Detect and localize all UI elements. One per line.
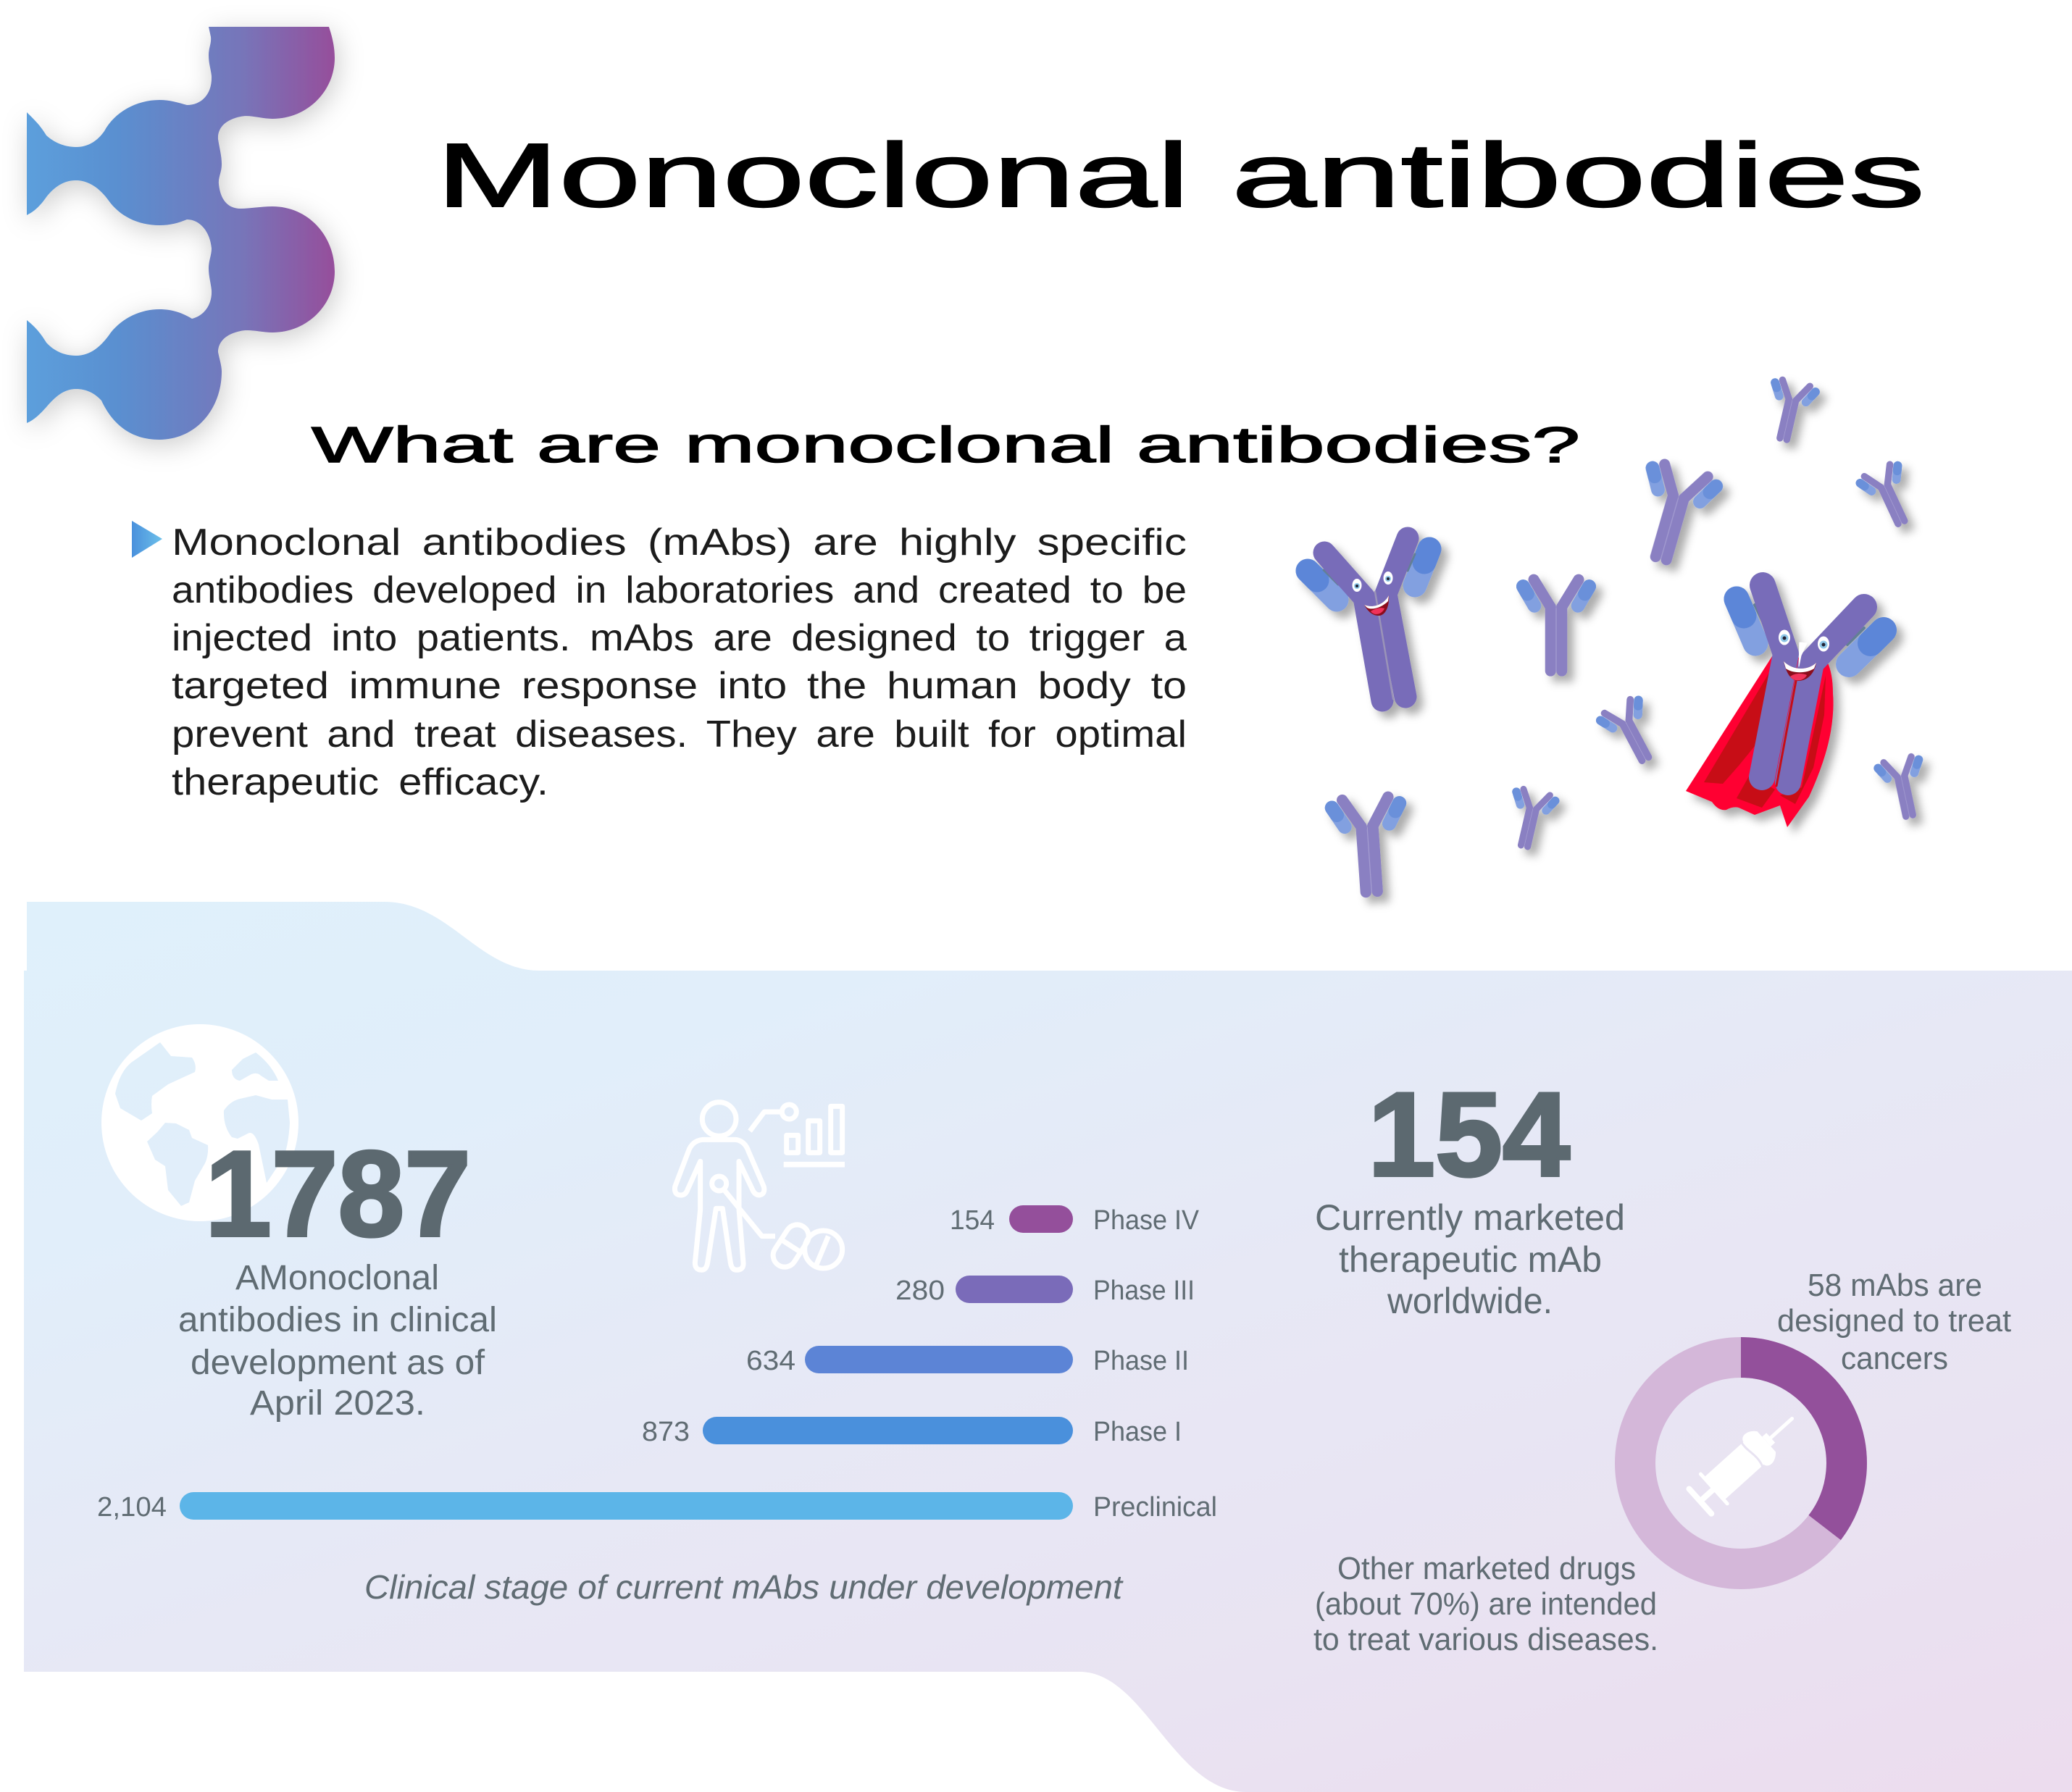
decorative logo blob	[27, 27, 335, 440]
bar: Phase III: Phase III	[1093, 1276, 1195, 1306]
caption: clinical development: April 2023.	[250, 1384, 425, 1423]
panel: statistics background	[24, 902, 2072, 1792]
donut chart	[1635, 1357, 1847, 1569]
antibody small 8	[1505, 788, 1556, 850]
antibody small 3	[1763, 378, 1816, 443]
caption: other drugs: to treat various diseases.	[1313, 1622, 1658, 1657]
intro paragraph: Monoclonal antibodies (mAbs) are highly specific	[172, 522, 1187, 564]
caption: clinical development: development as of	[191, 1344, 485, 1382]
caption: clinical development: antibodies in clinical	[178, 1301, 497, 1339]
stat: 154: 154	[1368, 1068, 1570, 1201]
caption: marketed mAbs: therapeutic mAb	[1339, 1239, 1602, 1280]
title	[436, 125, 1925, 226]
antibody small 4	[1858, 461, 1920, 531]
bar: Phase III	[895, 1276, 1195, 1306]
caption: cancer mAbs: 58 mAbs are	[1808, 1268, 1982, 1303]
bar: Phase IV: 154	[950, 1205, 995, 1236]
caption: other drugs: Other marketed drugs	[1337, 1551, 1636, 1586]
caption: other drugs: (about 70%) are intended	[1315, 1586, 1657, 1622]
bar: Phase I: 873	[642, 1417, 690, 1447]
icon: bullet triangle	[132, 521, 162, 558]
bar: Phase II: 634	[746, 1346, 795, 1376]
antibody small 7	[1332, 796, 1405, 894]
illustration: floating antibodies	[1332, 378, 1930, 894]
bar: Phase II	[746, 1346, 1189, 1376]
caption: marketed mAbs: worldwide.	[1387, 1281, 1553, 1321]
title: antibodies	[1232, 125, 1925, 226]
chart caption: Clinical stage of current mAbs under development	[364, 1568, 1124, 1606]
title: Monoclonal	[436, 125, 1190, 226]
bar: Preclinical: Preclinical	[1093, 1492, 1217, 1523]
bar: Phase IV: Phase IV	[1093, 1205, 1200, 1236]
caption: cancer mAbs: designed to treat	[1777, 1303, 2011, 1339]
intro paragraph: prevent and treat diseases. They are built for optimal	[172, 713, 1187, 755]
caption: other drugs	[1313, 1551, 1658, 1657]
chart: clinical stage bars	[97, 1205, 1217, 1523]
bar: Preclinical: 2,104	[97, 1492, 167, 1523]
icon: globe	[101, 1024, 298, 1221]
section heading: monoclonal	[685, 416, 1114, 473]
intro paragraph: therapeutic efficacy.	[172, 761, 548, 803]
icon: syringe	[1684, 1401, 1808, 1520]
bar: Phase I: Phase I	[1093, 1417, 1182, 1447]
section heading: antibodies?	[1137, 416, 1580, 473]
antibody small 1	[1523, 579, 1589, 671]
intro paragraph: injected into patients. mAbs are designed to trigger a	[172, 617, 1187, 659]
caption: marketed mAbs: Currently marketed	[1315, 1197, 1625, 1238]
caption: clinical development: AMonoclonal	[235, 1259, 439, 1297]
section heading	[312, 416, 1580, 473]
intro paragraph	[172, 522, 1187, 803]
section heading: are	[537, 416, 661, 473]
intro paragraph: antibodies developed in laboratories and created to be	[172, 569, 1187, 611]
intro paragraph: targeted immune response into the human body to	[172, 665, 1187, 707]
antibody small 2	[1629, 461, 1718, 567]
caption: marketed mAbs	[1315, 1197, 1625, 1321]
cape	[1686, 654, 1834, 827]
bar: Phase III: 280	[895, 1276, 945, 1306]
antibody small 6	[1877, 755, 1930, 820]
character: smiling antibody	[1308, 538, 1429, 700]
caption: clinical development	[178, 1259, 497, 1423]
character: hero antibody with cape	[1686, 585, 1884, 827]
bar: Phase I	[642, 1417, 1182, 1447]
antibody small 5	[1598, 696, 1664, 769]
bar: Preclinical	[97, 1492, 1217, 1523]
stat: 1787: 1787	[205, 1126, 471, 1262]
caption: cancer mAbs: cancers	[1841, 1341, 1948, 1376]
icon: patient with chart and pills	[674, 1102, 845, 1271]
caption: cancer mAbs	[1777, 1268, 2011, 1376]
section heading: What	[312, 416, 513, 473]
bar: Phase IV	[950, 1205, 1200, 1236]
bar: Phase II: Phase II	[1093, 1346, 1189, 1376]
